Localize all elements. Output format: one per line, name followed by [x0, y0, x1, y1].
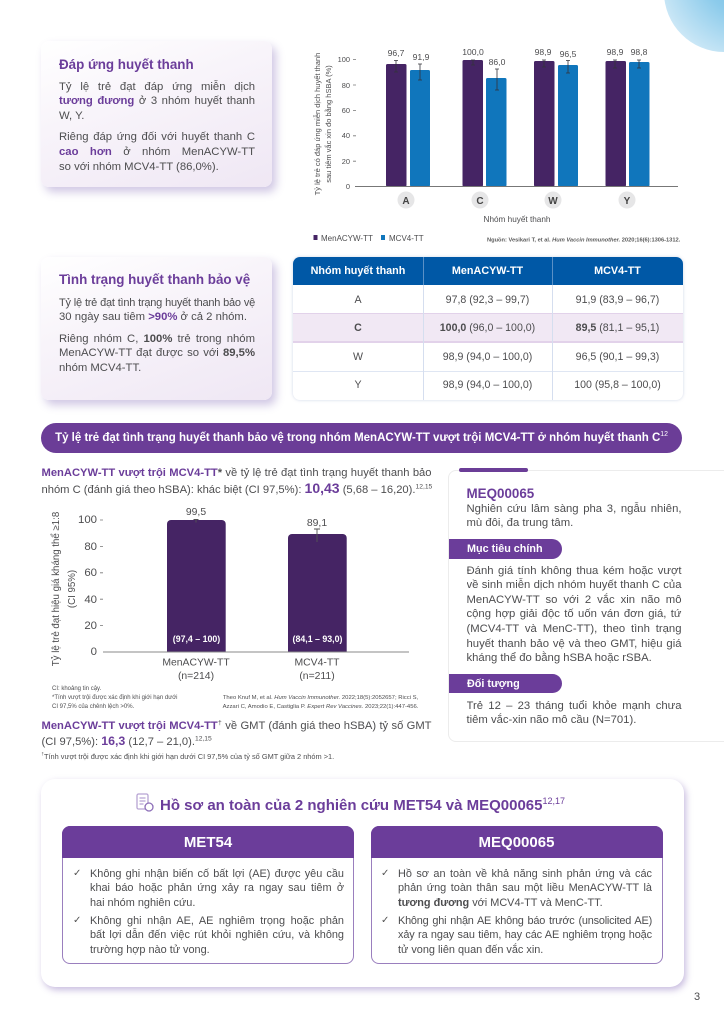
list: MEQ00065 points: xảy ra ngay sau tiêm, hay các AE nghiêm trọng hoặc [398, 929, 652, 941]
list: MET54 points: ✓ [73, 868, 81, 878]
serotype badges [398, 192, 636, 208]
value labels: 89,1 [307, 518, 327, 529]
category labels [162, 658, 340, 682]
heading: Tình trạng huyết thanh bảo vệ: Tình trạng huyết thanh bảo vệ [59, 272, 250, 286]
value labels: 96,7 [388, 48, 405, 58]
list: MEQ00065 points [381, 868, 652, 956]
text: seroprotection: Tỷ lệ trẻ đạt tình trạng huyết thanh bảo vệ [59, 297, 255, 309]
y-axis title: Tỷ lệ trẻ đạt hiệu giá kháng thể ≥1:8 [51, 512, 62, 666]
y-axis ticks [78, 514, 97, 658]
pill: Đối tượng [449, 674, 562, 693]
table: seroprotection by serogroup: 91,9 (83,9 – 96,7) [576, 294, 659, 306]
table header [293, 257, 683, 285]
text: superiority statement 2: (CI 97,5%): 16,3 (12,7 – 21,0).12,15 [42, 734, 212, 748]
text: subjects: tiêm vắc-xin não mô cầu (N=701). [466, 714, 636, 726]
legend: MenACYW-TT [321, 234, 373, 243]
list: MET54 points: trường hợp nào tử vong. [90, 944, 210, 956]
source: Nguồn: Vesikari T, et al. Hum Vaccin Immunother. 2020;16(6):1306-1312. [487, 238, 681, 244]
panel: MEQ00065 safety [370, 826, 662, 964]
text: study description: Nghiên cứu lâm sàng pha 3, ngẫu nhiên, [466, 503, 682, 515]
text: serotype response: so với nhóm MCV4-TT (86,0%). [59, 161, 219, 173]
text: objective: (MCV4-TT và MenC-TT), theo tình trạng [466, 623, 682, 635]
panel: MET54 [62, 826, 354, 964]
list: MEQ00065 points: Không ghi nhận AE không báo trước (unsolicited AE) [398, 915, 652, 927]
legend: MCV4-TT [389, 234, 424, 243]
y-axis title: Tỷ lệ trẻ có đáp ứng miễn dịch huyết thanh [313, 53, 322, 195]
y-axis ticks: 80 [84, 541, 97, 553]
table: seroprotection by serogroup: C [354, 322, 362, 334]
footnotes: chart: CI: khoảng tin cậy. [52, 686, 101, 692]
x-axis title: Nhóm huyết thanh [484, 215, 551, 224]
footnotes: chart: *Tính vượt trội được xác định khi giới hạn dưới [52, 695, 178, 701]
y-axis title: sau tiêm vắc xin đo bằng hSBA (%) [324, 65, 333, 183]
value labels: 99,5 [186, 507, 206, 518]
value labels: 96,5 [560, 49, 577, 59]
table: seroprotection by serogroup: Y [354, 379, 362, 391]
text: subjects [466, 700, 682, 726]
heading: MEQ00065: MEQ00065 [466, 486, 534, 500]
category labels: MenACYW-TT [162, 658, 230, 668]
pill: Mục tiêu chính: Mục tiêu chính [467, 543, 543, 555]
text: serotype response [59, 80, 255, 173]
y-axis ticks: 60 [84, 567, 97, 579]
y-axis ticks: 20 [84, 620, 97, 632]
category labels: (n=211) [299, 671, 335, 682]
table: seroprotection by serogroup: 98,9 (94,0 – 100,0) [443, 379, 532, 391]
CI labels in bars: (97,4 – 100) [173, 634, 220, 644]
footnotes: chart: CI 97,5% của chênh lệch >0%. [52, 704, 134, 710]
value labels: 98,9 [535, 47, 552, 57]
list: MET54 points: khai báo hoặc phản ứng xảy ra ngay sau tiêm ở [90, 882, 344, 894]
list: MET54 points [73, 868, 344, 956]
bar chart: seroprotection group C [50, 507, 409, 682]
table: seroprotection by serogroup: A [354, 294, 362, 306]
header: MET54 [62, 826, 354, 858]
page number: 3 [694, 991, 700, 1003]
text: serotype response: W, Y. [59, 110, 84, 122]
bar chart: serotype response: Y [624, 196, 631, 207]
references: Azzari C, Amodio E, Castiglia P. Expert Rev Vaccines. 2023;22(1):447-456. [223, 704, 418, 710]
value labels [186, 507, 327, 529]
table: seroprotection by serogroup: 89,5 (81,1 – 95,1) [576, 322, 659, 334]
error bars [194, 520, 320, 542]
panel: safety profile [41, 779, 684, 987]
y-axis ticks: 0 [346, 182, 350, 191]
CI labels in bars: (84,1 – 93,0) [293, 634, 343, 644]
footnotes: chart [52, 686, 178, 710]
header: MET54: MET54 [184, 834, 232, 851]
highlighted row C [293, 313, 683, 343]
value labels: 91,9 [413, 52, 430, 62]
y-axis ticks: 80 [342, 81, 350, 90]
panel: MEQ00065 study [448, 470, 724, 742]
text: objective: kháng thể đo bằng hSBA hoặc rSBA. [466, 652, 652, 664]
y-axis title: (CI 95%) [67, 570, 78, 608]
y-axis ticks: 40 [84, 594, 97, 606]
y-axis ticks: 0 [91, 646, 97, 658]
bars [386, 60, 650, 186]
text: objective [466, 565, 682, 664]
accent bar [459, 468, 528, 472]
table: seroprotection by serogroup: 97,8 (92,3 – 99,7) [446, 294, 529, 306]
text: superiority statement 1 [42, 467, 432, 496]
banner heading: Tỷ lệ trẻ đạt tình trạng huyết thanh bảo vệ trong nhóm MenACYW-TT vượt trội MCV4-TT ở nhóm huyết thanh C12 [55, 431, 668, 444]
list: MEQ00065 points: ✓ [381, 914, 389, 926]
footnote: GMT: †Tính vượt trội được xác định khi giới hạn dưới CI 97,5% của tỷ số GMT giữa 2 nhóm >1. [42, 752, 334, 761]
heading: Đáp ứng huyết thanh: Đáp ứng huyết thanh [59, 57, 194, 72]
text: seroprotection: nhóm MCV4-TT. [59, 362, 141, 374]
banner heading [41, 423, 682, 452]
decorative corner: blue gradient [664, 0, 724, 52]
legend [314, 234, 424, 243]
table header: MenACYW-TT [452, 265, 523, 277]
header: MEQ00065 safety: MEQ00065 [479, 834, 554, 851]
y-axis ticks [338, 55, 350, 191]
list: MEQ00065 points: phản ứng toàn thân sau một liều MenACYW-TT là [398, 882, 652, 894]
text: superiority statement 2 [42, 719, 432, 748]
text: seroprotection: 30 ngày sau tiêm >90% ở cả 2 nhóm. [59, 311, 247, 323]
value labels: 98,9 [607, 47, 624, 57]
panel: Tình trạng huyết thanh bảo vệ [41, 257, 272, 400]
value labels: 98,8 [631, 47, 648, 57]
bar chart: serotype response: A [402, 196, 410, 207]
error bars [394, 60, 641, 90]
list: MEQ00065 points: tương đương với MCV4-TT và MenC-TT. [398, 897, 603, 909]
list: MEQ00065 points: ✓ [381, 868, 389, 878]
table: seroprotection by serogroup [293, 257, 683, 400]
y-axis title [51, 512, 78, 666]
list: MET54 points: Không ghi nhận biến cố bất lợi (AE) được yêu cầu [90, 868, 344, 880]
bar chart: serotype response [313, 47, 681, 244]
list: MEQ00065 points: Hồ sơ an toàn về khả năng sinh phản ứng và các [398, 868, 652, 880]
table: seroprotection by serogroup: 100 (95,8 – 100,0) [574, 379, 661, 391]
table header: MCV4-TT [594, 265, 641, 277]
CI labels in bars [173, 634, 343, 644]
text: serotype response: Riêng đáp ứng đối với huyết thanh C [59, 131, 255, 143]
y-axis ticks: 60 [342, 106, 350, 115]
references: Theo Knuf M, et al. Hum Vaccin Immunother. 2022;18(5):2052657; Ricci S, [223, 695, 418, 701]
table: seroprotection by serogroup: 96,5 (90,1 – 99,3) [576, 351, 659, 363]
icon: safety checklist [136, 793, 154, 812]
references [222, 695, 418, 710]
y-axis ticks: 40 [342, 131, 350, 140]
table: seroprotection by serogroup: W [353, 351, 363, 363]
list: MEQ00065 points: tử vong liên quan đến vắc xin. [398, 944, 543, 956]
y-axis ticks: 100 [338, 55, 350, 64]
y-axis ticks: 20 [342, 157, 350, 166]
pill: Đối tượng: Đối tượng [467, 678, 520, 690]
y-axis title [313, 53, 333, 195]
table: seroprotection by serogroup: 100,0 (96,0 – 100,0) [440, 322, 535, 334]
bar chart: serotype response: W [548, 196, 558, 207]
text: seroprotection: Riêng nhóm C, 100% trẻ trong nhóm [59, 333, 255, 345]
text: objective: huyết thanh bảo vệ và theo GMT, hiệu giá [466, 638, 682, 650]
text: study description [466, 502, 682, 529]
list: MET54 points: hai nhóm nghiên cứu. [90, 897, 195, 909]
table: seroprotection by serogroup: 98,9 (94,0 – 100,0) [443, 351, 532, 363]
text: seroprotection [59, 297, 255, 374]
list: MET54 points: ✓ [73, 914, 81, 926]
bar chart: serotype response: C [476, 196, 484, 207]
table header: Nhóm huyết thanh [311, 265, 405, 277]
text: superiority statement 2: MenACYW-TT vượt trội MCV4-TT† về GMT (đánh giá theo hSBA) tỷ số GMT [42, 719, 432, 732]
header: MEQ00065 safety [370, 826, 662, 858]
text: study description: mù đôi, đa trung tâm. [466, 517, 573, 529]
category labels: (n=214) [178, 671, 214, 682]
text: serotype response: Tỷ lệ trẻ đạt đáp ứng miễn dịch [59, 81, 255, 93]
value labels: 86,0 [489, 57, 506, 67]
category labels: MCV4-TT [294, 658, 340, 668]
value labels: 100,0 [462, 47, 484, 57]
pill: Mục tiêu chính [449, 539, 562, 558]
bars [167, 520, 347, 652]
y-axis ticks: 100 [78, 514, 97, 526]
value labels [388, 47, 648, 67]
text: superiority statement 1: nhóm C (đánh giá theo hSBA): khác biệt (CI 97,5%): 10,43 (5,68 – 16,20).12,15 [42, 480, 432, 496]
panel: Đáp ứng huyết thanh [41, 41, 272, 187]
text: objective: về sinh miễn dịch nhóm huyết thanh C của [466, 579, 682, 591]
heading: safety profile: Hồ sơ an toàn của 2 nghiên cứu MET54 và MEQ0006512,17 [160, 796, 565, 814]
